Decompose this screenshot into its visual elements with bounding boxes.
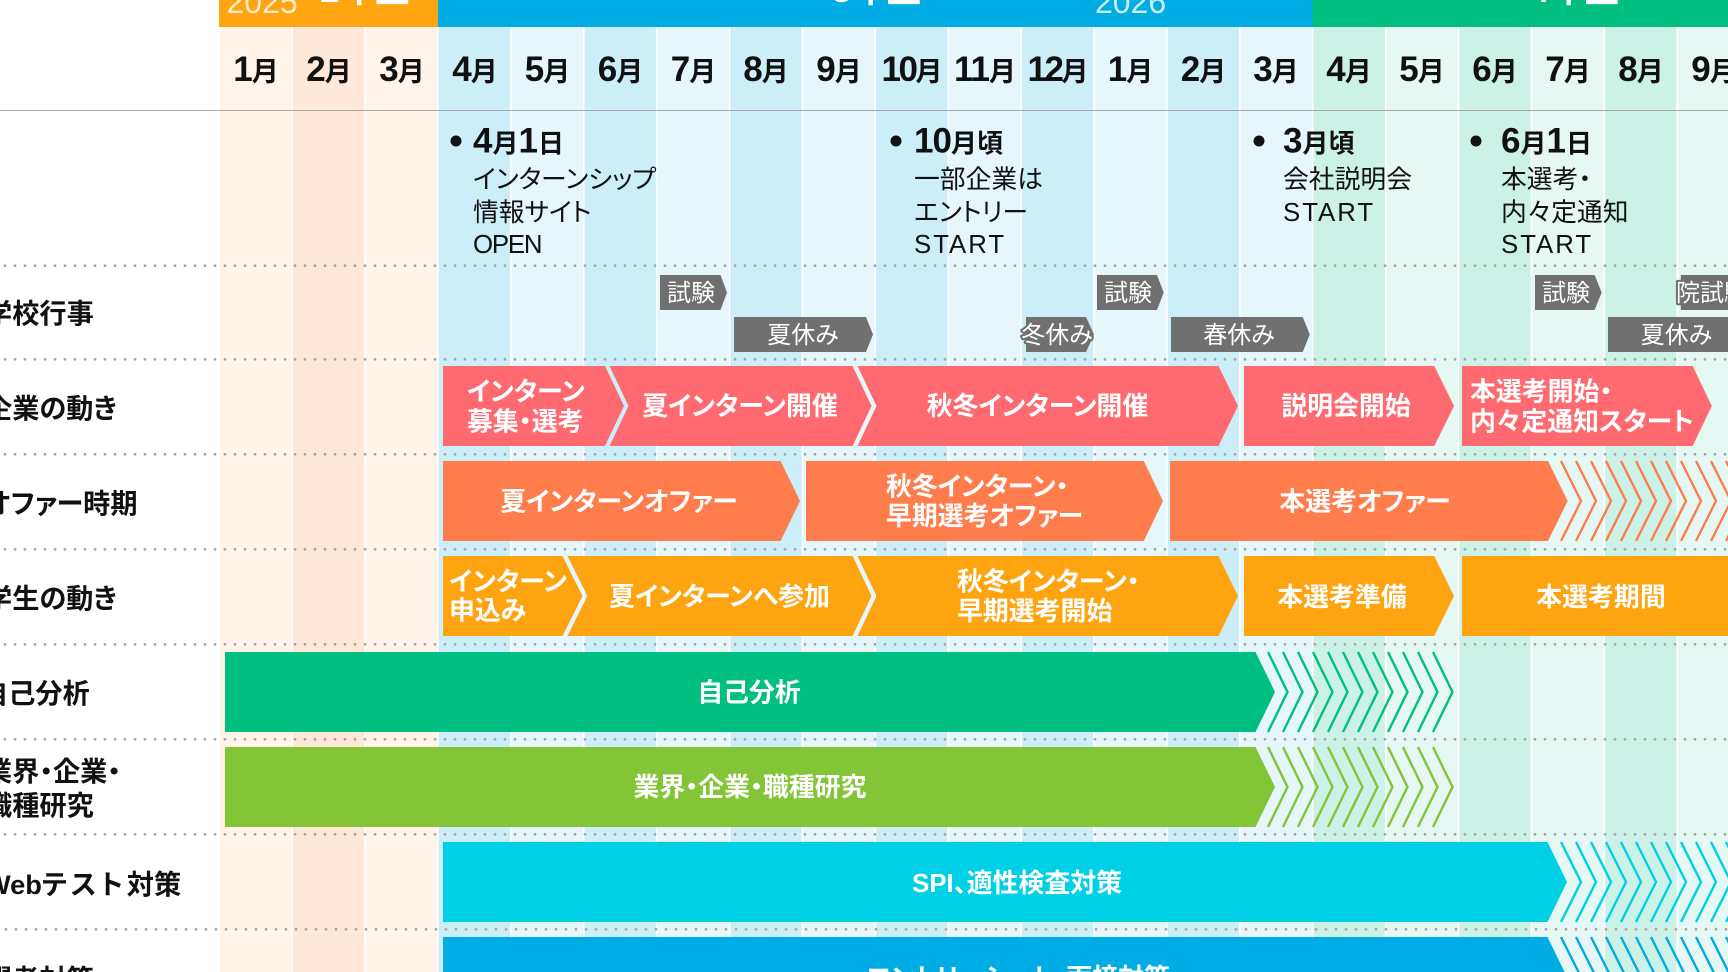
month labels: 10月 <box>882 50 942 89</box>
header band: year groups <box>219 0 1728 27</box>
row: 企業の動き: 内々定通知スタート <box>1470 408 1694 436</box>
row: 学校行事: 試験 <box>667 280 715 307</box>
row: 学生の動き: インターン <box>449 568 567 596</box>
row: 企業の動き <box>0 366 1712 446</box>
month labels: 5月 <box>1399 50 1445 89</box>
row: 学校行事 <box>0 275 1728 352</box>
month labels: 9月 <box>816 50 862 89</box>
month labels: 6月 <box>598 50 643 89</box>
row: 自己分析 <box>0 652 1452 732</box>
row: 企業の動き: 本選考開始・ <box>1470 378 1612 406</box>
row: 業界・企業・職種研究: 業界・企業・職種研究 <box>633 773 867 802</box>
row: オファー時期 <box>0 461 1728 541</box>
month labels: 7月 <box>671 50 716 89</box>
month labels: 5月 <box>525 50 570 89</box>
milestone note: 10月頃: START <box>914 231 1006 259</box>
row: Webテスト対策 <box>0 842 1728 922</box>
row: 企業の動き: 秋冬インターン開催 <box>927 392 1148 421</box>
row: 企業の動き: 説明会開始 <box>1281 392 1411 421</box>
month labels: 4月 <box>452 50 498 89</box>
row: 企業の動き: インターン <box>467 378 585 406</box>
milestone note: 6月1日: 6月1日 <box>1501 122 1592 160</box>
milestone note: 10月頃: 一部企業は <box>914 165 1043 194</box>
month labels: 3月 <box>1253 50 1299 89</box>
milestone note: 3月頃: START <box>1283 199 1375 227</box>
month labels: 3月 <box>379 50 425 89</box>
month labels: 4月 <box>1326 50 1372 89</box>
row: 学校行事: 夏休み <box>1641 322 1712 349</box>
row: 学校行事: 冬休み <box>1021 322 1093 349</box>
milestone note: 6月1日: 本選考・ <box>1501 165 1591 194</box>
row: 学校行事: 春休み <box>1203 322 1275 349</box>
row: 自己分析: 自己分析 <box>697 678 801 708</box>
row: オファー時期: 早期選考オファー <box>886 502 1083 531</box>
row: 学生の動き <box>0 556 1728 636</box>
month labels <box>233 50 1728 89</box>
milestone note: 3月頃: 会社説明会 <box>1283 165 1412 194</box>
row: 学校行事: 試験 <box>1542 280 1590 307</box>
row: 業界・企業・職種研究 <box>0 747 1452 827</box>
milestone note: 10月頃: 10月頃 <box>914 122 1003 160</box>
milestone note: 4月1日 <box>450 122 657 259</box>
row: 選考対策 <box>0 937 1728 972</box>
month labels: 6月 <box>1472 50 1518 89</box>
row: 企業の動き: 夏インターン開催 <box>642 392 838 421</box>
row: 学校行事: 夏休み <box>767 322 839 349</box>
month labels: 1月 <box>233 50 279 89</box>
row: オファー時期: 本選考オファー <box>1279 488 1451 516</box>
month labels: 12月 <box>1028 50 1088 89</box>
month labels: 8月 <box>743 50 789 89</box>
row: 学生の動き: 早期選考開始 <box>957 597 1112 626</box>
milestone note: 6月1日: 内々定通知 <box>1501 198 1629 227</box>
row: オファー時期: 夏インターンオファー <box>500 488 738 516</box>
row: 学生の動き: 申込み <box>449 596 526 626</box>
month labels: 2月 <box>306 50 352 89</box>
month labels: 8月 <box>1618 50 1664 89</box>
month labels: 2月 <box>1181 50 1226 89</box>
row: オファー時期: 秋冬インターン・ <box>886 472 1069 502</box>
month labels: 11月 <box>954 50 1016 89</box>
row: Webテスト対策: SPI、適性検査対策 <box>912 869 1122 898</box>
milestone note: 4月1日: 情報サイト <box>473 198 592 227</box>
milestone note: 3月頃 <box>1254 122 1412 227</box>
milestone note: 4月1日: OPEN <box>473 231 541 259</box>
milestone note: 10月頃 <box>890 122 1043 259</box>
month labels: 7月 <box>1545 50 1591 89</box>
row: 企業の動き: 募集・選考 <box>467 408 584 436</box>
milestone note: 10月頃: エントリー <box>914 199 1028 227</box>
row: 学校行事: 試験 <box>1104 280 1152 307</box>
milestone note: 6月1日: START <box>1501 231 1593 259</box>
milestone note: 3月頃: 3月頃 <box>1283 122 1354 160</box>
row: 学生の動き: 本選考準備 <box>1277 583 1407 612</box>
row: 学生の動き: 本選考期間 <box>1536 583 1666 612</box>
milestone note: 6月1日 <box>1470 122 1629 259</box>
row: 学生の動き: 秋冬インターン・ <box>957 568 1140 596</box>
milestone note: 4月1日: 4月1日 <box>473 122 564 160</box>
milestone note: 4月1日: インターンシップ <box>473 165 657 194</box>
month labels: 1月 <box>1108 50 1153 89</box>
row: 学生の動き: 夏インターンへ参加 <box>609 582 830 612</box>
